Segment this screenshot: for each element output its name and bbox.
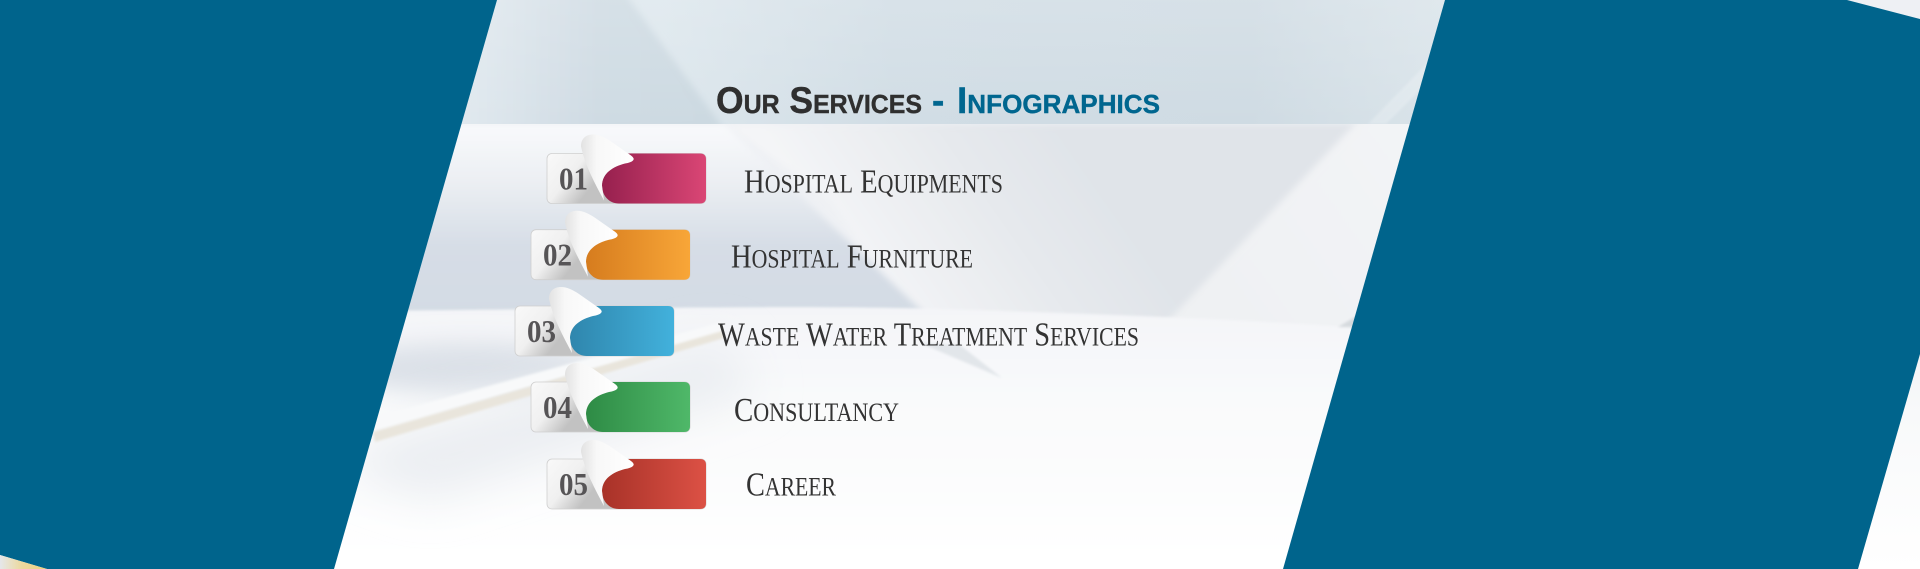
- item 02: label: Hospital Furniture: [731, 236, 973, 276]
- bottom-left gold corner: [0, 555, 47, 569]
- title: -: [932, 80, 944, 121]
- left blue panel: [0, 0, 497, 569]
- item 03: label: Waste Water Treatment Services: [718, 314, 1139, 354]
- top tinted band: [462, 0, 1445, 124]
- item 03: tag: 03: [527, 313, 556, 349]
- title: Our Services: [716, 80, 922, 121]
- item 05: tag: [547, 440, 706, 509]
- item 02: tag: 02: [543, 236, 572, 272]
- title: [716, 80, 1160, 121]
- item 01: tag: [547, 134, 706, 204]
- item 01: label: Hospital Equipments: [744, 160, 1003, 202]
- item 02: tag: [531, 211, 690, 280]
- item 05: tag: 05: [559, 466, 588, 502]
- title: Infographics: [957, 80, 1160, 121]
- item 01: tag: 01: [559, 160, 588, 196]
- right blue panel: [1283, 0, 1920, 569]
- item 04: label: Consultancy: [734, 389, 899, 430]
- item 05: label: Career: [746, 464, 837, 504]
- item 04: tag: [531, 363, 690, 432]
- item 03: tag: [515, 287, 674, 356]
- item 04: tag: 04: [543, 389, 572, 425]
